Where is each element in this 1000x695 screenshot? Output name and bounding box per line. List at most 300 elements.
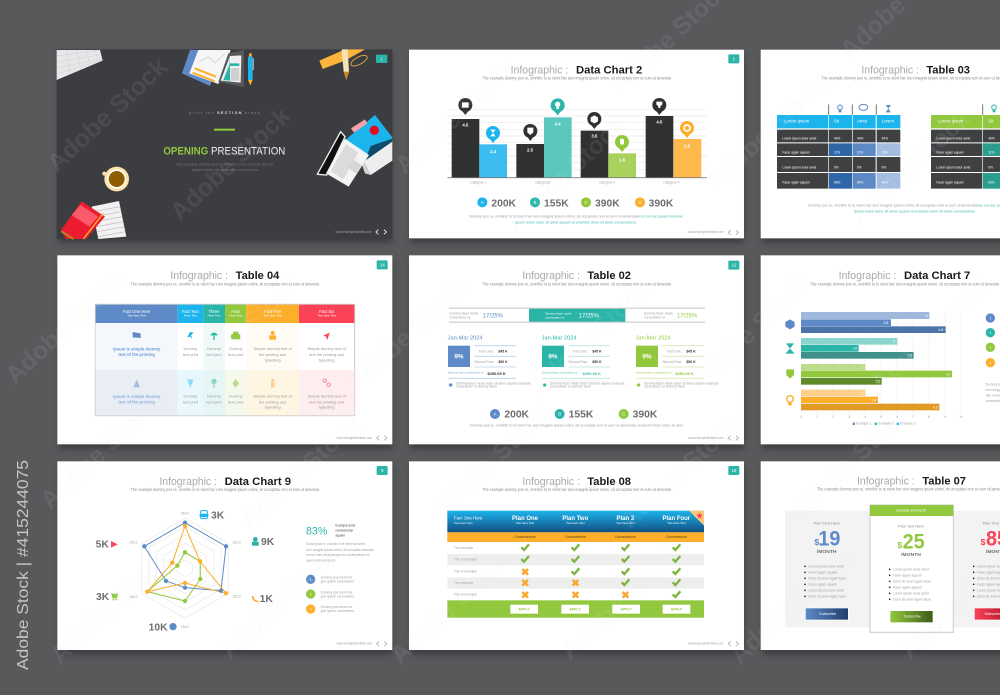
horizontal bar chart bbox=[800, 312, 963, 419]
quarter card: teal: $50 K bbox=[592, 360, 602, 364]
plan card: blue: Dolor sit amet agam facer bbox=[808, 577, 847, 581]
watermark layer: Adobe Stock bbox=[700, 72, 831, 196]
footer navigation bbox=[688, 641, 738, 646]
heading: table 04: Infographic : bbox=[170, 270, 228, 282]
legend: C bbox=[622, 412, 625, 417]
pricing table header: Two here Text bbox=[616, 521, 635, 525]
table rows: The example bbox=[454, 581, 473, 585]
watermark layer: Adobe Stock bbox=[235, 410, 366, 534]
slide number badge bbox=[728, 261, 739, 270]
quarter card: teal: Fact One: bbox=[573, 350, 588, 354]
plan card: green featured: Facer agam aquam bbox=[893, 586, 922, 590]
heading: table 07: Table 07 bbox=[922, 475, 966, 487]
horizontal bar chart: 3 bbox=[848, 415, 850, 419]
quarter card: teal: Dummy facer consectetur ut bbox=[542, 371, 578, 375]
table: facts: Two here Text bbox=[317, 314, 336, 318]
quarter card: green: 9% bbox=[642, 354, 652, 361]
quarter card: teal: 9% bbox=[548, 354, 558, 361]
quarter card: green: Second Fact: bbox=[662, 360, 682, 364]
numbered markers: 4 bbox=[989, 361, 991, 365]
summary strip: Dummy facer mode bbox=[644, 311, 673, 315]
table: facts: Simple dummy text of bbox=[308, 393, 347, 398]
text: table subtitle: The example dummy pos re, omnihic to te nient har cien imagnis ipsum enimi, sit occuptatu rem et eum ut lamenda bbox=[482, 487, 671, 492]
legend list: gne ipsum consectetur bbox=[321, 594, 355, 598]
table rows: The ut example bbox=[454, 593, 477, 597]
heading: table 08: Table 08 bbox=[587, 476, 631, 488]
plan card: green featured: Plan Text Here bbox=[898, 524, 925, 529]
quarter card: green bbox=[636, 336, 719, 389]
legend: 200K bbox=[491, 198, 517, 209]
table: facts: Ipsum is simple dummy bbox=[113, 347, 161, 352]
legend: 390K bbox=[649, 198, 674, 209]
table: blue: 6% bbox=[882, 166, 886, 170]
plan card: blue: /MONTH bbox=[817, 549, 837, 555]
legend: A bbox=[494, 412, 497, 417]
stat: 83 percent: Example dolor bbox=[335, 524, 356, 528]
plan card: green featured: Subscribe bbox=[904, 615, 921, 619]
quarter card: green: $45 K bbox=[686, 350, 696, 354]
table: blue: 40% bbox=[834, 137, 841, 141]
table: green: Lorem ipsum dolor amet bbox=[936, 166, 970, 170]
bar chart: 2.8 bbox=[684, 144, 691, 149]
text: table description: Dummy pos re, omnihic to te nient har cien imagnis ipsum enimi, sit occuptatu rem et eum ut lamendae bbox=[808, 203, 979, 208]
table: blue: 40% bbox=[882, 137, 888, 141]
heading: opening presentation: OPENING PRESENTATION bbox=[163, 146, 285, 158]
watermark layer: Adobe Stock bbox=[525, 275, 656, 399]
bar chart: 2.4 bbox=[490, 149, 497, 154]
icon: pin bell bbox=[615, 135, 629, 152]
icon: coffee cup bbox=[102, 167, 129, 191]
heading: table 03 bbox=[861, 64, 970, 76]
radar chart: 15/12 bbox=[129, 595, 138, 599]
legend list bbox=[306, 575, 355, 614]
chart legend: Example 2 bbox=[878, 422, 894, 426]
plan card: blue: Subscribe bbox=[819, 612, 836, 616]
table: facts: Simple dummy text of bbox=[308, 346, 347, 351]
plan card: blue: Lorem ipsum dolor amet bbox=[808, 589, 844, 593]
panel: data chart 2 slide bbox=[409, 50, 744, 243]
heading: table 07 bbox=[857, 475, 966, 487]
heading: table 02 bbox=[522, 270, 631, 282]
legend: 155K bbox=[569, 410, 594, 421]
heading: table 04 bbox=[170, 270, 280, 282]
pricing table header: Plan One bbox=[512, 516, 539, 522]
radar label: printer 3K: 3K bbox=[211, 510, 225, 521]
footer navigation bbox=[688, 436, 738, 440]
bar chart: 2.5 bbox=[527, 148, 534, 153]
panel: data chart 9 slide bbox=[57, 461, 392, 655]
text: chart description: ipsum lorem dolor sit amet aquam ut example dolor sit amet consectetune bbox=[515, 219, 637, 224]
plan card: blue: 19 bbox=[818, 527, 840, 551]
heading: data chart 7: Data Chart 7 bbox=[904, 270, 970, 282]
table: facts: Simple dummy text of bbox=[254, 393, 293, 398]
text: opening description: ipsum enimi, sit occuptatu rem et eum bbox=[192, 168, 258, 172]
horizontal bar chart: 4.3 bbox=[933, 405, 938, 409]
legend list: gne ipsum consectetur bbox=[321, 609, 355, 613]
quarter card: blue: $45 K bbox=[498, 350, 508, 354]
apply button row: APPLY bbox=[620, 608, 632, 612]
table: blue: 11% bbox=[857, 150, 863, 154]
heading: data chart 9: Data Chart 9 bbox=[225, 476, 291, 488]
radar label: flag 5K: 5K bbox=[96, 540, 109, 551]
table: green: 11% bbox=[988, 150, 995, 154]
summary strip: 17/25% bbox=[579, 314, 600, 320]
table: facts: Here Text bbox=[229, 314, 242, 318]
radar label: cart 3K bbox=[96, 592, 118, 603]
watermark layer: Adobe Stock bbox=[342, 273, 473, 397]
legend: 390K bbox=[595, 198, 620, 209]
footer navigation: www.examplefontsite.com bbox=[337, 436, 372, 440]
watermark layer: Adobe Stock bbox=[845, 105, 976, 229]
text: opening description bbox=[176, 163, 274, 172]
table: facts: Two here Text bbox=[127, 314, 146, 318]
icon: notebook and paper bbox=[61, 201, 126, 239]
radar chart: 15/12 bbox=[181, 511, 189, 515]
icons: table row one bbox=[133, 331, 330, 340]
pricing table header: Two here Text bbox=[516, 521, 534, 525]
watermark layer: Adobe Stock bbox=[500, 112, 631, 236]
quarter card: green: Dummy facer consectetur ut bbox=[636, 371, 672, 375]
watermark layer: Adobe Stock bbox=[785, 400, 916, 524]
icon: documents and tablet bbox=[182, 50, 244, 87]
table: facts: Dummy bbox=[207, 393, 221, 398]
horizontal bar chart: 8 bbox=[928, 415, 930, 419]
summary strip: Dummy facer mode bbox=[545, 311, 572, 315]
legend list: gne ipsum consectetur bbox=[321, 579, 355, 583]
pricing table header: Two here Text bbox=[454, 521, 473, 525]
category labels bbox=[470, 180, 680, 184]
radar chart: 15/12 bbox=[232, 541, 241, 545]
quarter card: green: Fact One: bbox=[667, 350, 682, 354]
slide number badge bbox=[376, 55, 387, 63]
table: blue: Facer agam aquam bbox=[782, 180, 810, 184]
summary strip: consectetur ut bbox=[449, 316, 470, 320]
plan card: green featured: /MONTH bbox=[901, 552, 921, 558]
horizontal bar chart: 2.4 bbox=[872, 398, 876, 402]
icon: shield bbox=[786, 369, 794, 379]
footer navigation: www.examplefontsite.com bbox=[688, 436, 724, 440]
table: facts: text the printing and bbox=[309, 399, 344, 404]
slide number badge: 14 bbox=[380, 262, 385, 267]
radar chart: 15/12 bbox=[129, 541, 138, 545]
chart legend: Example 3 bbox=[900, 422, 916, 426]
vertical stock credit: Adobe Stock | #415244075 bbox=[15, 460, 32, 670]
table: facts: Fact One Here bbox=[123, 309, 151, 314]
table: facts: Three bbox=[209, 309, 220, 314]
summary strip bbox=[449, 308, 705, 323]
horizontal bar chart: 2 bbox=[861, 391, 863, 395]
cross marks bbox=[522, 569, 628, 598]
text: table description bbox=[808, 203, 1000, 213]
table: green: Lorem Ipsum bbox=[938, 118, 964, 123]
table rows: The ut example bbox=[454, 558, 477, 562]
quarter card: blue: Jan-Mar 2024 bbox=[448, 336, 483, 342]
icon: hourglass bbox=[785, 343, 795, 354]
table: blue: 11% bbox=[882, 150, 888, 154]
stat: 83 percent: consectetuer bbox=[335, 529, 353, 533]
table: facts: Dummy bbox=[229, 346, 243, 351]
table: blue: Facer agam aquam bbox=[782, 150, 810, 154]
quarter card: blue bbox=[448, 336, 531, 389]
watermark layer: Adobe Stock bbox=[165, 102, 296, 226]
pricing table header: Two here Text bbox=[566, 521, 585, 525]
slide number badge: 9 bbox=[381, 468, 384, 473]
watermark layer: Adobe Stock bbox=[45, 545, 176, 669]
horizontal bar chart: 1 bbox=[816, 415, 818, 419]
orange subheader row: Consectetune bbox=[666, 535, 687, 539]
text: opening description: The example dummy pos re, omnihic to te nient har cien ut bbox=[176, 163, 274, 167]
plan card: blue: $ bbox=[814, 537, 819, 547]
icons: table row two bbox=[133, 379, 330, 388]
plan card: blue: Plan Text Here bbox=[814, 521, 840, 526]
check marks bbox=[521, 544, 680, 597]
legend: D bbox=[638, 200, 642, 205]
bar chart bbox=[447, 109, 707, 178]
icon: envelope box bbox=[346, 115, 392, 175]
legend list: Dummy pos nient ma bbox=[321, 590, 352, 594]
watermark layer: Adobe Stock bbox=[0, 265, 131, 389]
table: blue: Lorem bbox=[882, 118, 894, 123]
legend: C bbox=[584, 200, 588, 205]
numbered markers: 2 bbox=[989, 331, 991, 335]
plan card: green featured: Dolor sit amet agam facer bbox=[893, 580, 932, 584]
table: facts: Dummy bbox=[207, 346, 221, 351]
numbered markers bbox=[986, 313, 995, 367]
table: facts: Dummy bbox=[183, 346, 197, 351]
plan card: green featured: Dolor sit amet agam facer bbox=[893, 598, 932, 602]
table: blue: Lorem ipsum dolor amet bbox=[782, 166, 816, 170]
heading: data chart 7: Infographic : bbox=[839, 270, 896, 282]
panel: table 07 slide bbox=[761, 461, 1000, 655]
horizontal bar chart: 2.8 bbox=[884, 321, 888, 325]
text: section label: After the SECTION break bbox=[189, 111, 261, 115]
watermark layer: Adobe Stock bbox=[35, 390, 166, 514]
table: green: 86% bbox=[988, 180, 995, 184]
summary strip: 17/25% bbox=[677, 314, 698, 320]
pricing table header: Two here Text bbox=[667, 521, 686, 525]
table: green: Lorem ipsum dolor amet bbox=[936, 137, 970, 141]
heading: table 08: Infographic : bbox=[522, 476, 580, 488]
heading: data chart 9: Infographic : bbox=[159, 476, 217, 488]
horizontal bar chart: 5 bbox=[880, 415, 882, 419]
radar chart: 15/12 bbox=[232, 594, 241, 598]
pricing table header: Plan Four bbox=[663, 516, 691, 522]
table: facts: text of the printing bbox=[118, 352, 155, 357]
slide number badge: 1 bbox=[381, 56, 384, 61]
numbered markers: 3 bbox=[989, 346, 991, 350]
table: facts: text of the printing bbox=[118, 399, 155, 404]
legend list: 2 bbox=[310, 592, 312, 596]
category labels: Category 4 bbox=[663, 180, 680, 184]
quarter card: green: consectetur ut dummy facer bbox=[644, 385, 686, 389]
watermark layer: Adobe Stock bbox=[725, 545, 856, 669]
table: facts: text print bbox=[228, 352, 244, 357]
table: facts: Fact Six bbox=[319, 309, 335, 314]
horizontal bar chart: 1.8 bbox=[852, 347, 857, 351]
legend list: Dummy pos nient ma bbox=[321, 605, 352, 609]
table: blue: Sit bbox=[834, 118, 840, 123]
slide number badge: 2 bbox=[732, 56, 735, 61]
summary strip: consectetur ut bbox=[644, 316, 665, 320]
text: chart description: Dummy pos re, omnihic to te nient har cien imagnis ipsum enimi, sit occuptatu rem et eum ut lamendae bbox=[469, 214, 640, 219]
plan card: red bbox=[954, 511, 1000, 627]
table: facts: text print bbox=[206, 352, 223, 357]
plan card: blue bbox=[785, 511, 870, 627]
radar label: globe 10K bbox=[149, 622, 177, 633]
quarter card: teal bbox=[542, 336, 625, 389]
chart legend bbox=[853, 422, 916, 426]
icon: laptop bbox=[317, 132, 369, 187]
heading: table 08 bbox=[522, 476, 631, 488]
legend bbox=[490, 409, 658, 421]
footer navigation bbox=[336, 230, 386, 234]
watermark layer: Adobe Stock bbox=[175, 270, 306, 394]
quarter card: blue: $450.05 K bbox=[487, 371, 506, 376]
slide number badge bbox=[377, 260, 388, 269]
table: facts: text print bbox=[183, 399, 199, 404]
quarter card: blue: $50 K bbox=[498, 360, 508, 364]
text: chart description bbox=[469, 214, 683, 224]
category labels: Category 3 bbox=[599, 180, 615, 184]
footer navigation: www.examplefontsite.com bbox=[336, 230, 372, 234]
table rows: The example bbox=[454, 546, 473, 550]
radar chart bbox=[129, 511, 241, 629]
divider bar bbox=[214, 129, 235, 131]
apply button row bbox=[447, 600, 704, 618]
table: blue: Amet bbox=[857, 118, 868, 123]
table: facts: text the printing and bbox=[309, 352, 344, 357]
footer navigation: www.examplefontsite.com bbox=[688, 230, 724, 234]
plan card: red: $ bbox=[981, 537, 986, 547]
orange subheader row bbox=[447, 532, 704, 542]
quarter card: blue: 9% bbox=[454, 354, 464, 361]
text: stat paragraph: rem et eum ut lamendae res consectetuer ex bbox=[306, 553, 370, 557]
table: blue: 11% bbox=[834, 150, 840, 154]
table: green: Facer agam aquam bbox=[936, 180, 964, 184]
table: facts: text print bbox=[183, 352, 199, 357]
quarter card: teal: Dummy facer mode dolor sit amet aquam example bbox=[550, 382, 625, 386]
legend: A bbox=[481, 200, 484, 205]
footer navigation bbox=[337, 641, 387, 646]
quarter card: teal: consectetur ut dummy facer bbox=[550, 385, 592, 389]
horizontal bar chart: 2 bbox=[832, 415, 834, 419]
heading: data chart 2 bbox=[511, 64, 642, 76]
legend list: Dummy pos nient ma bbox=[321, 575, 352, 579]
table: facts: Dummy bbox=[229, 393, 243, 398]
slide number badge bbox=[377, 466, 388, 475]
table: blue: 86% bbox=[882, 180, 888, 184]
horizontal bar chart: 10 bbox=[959, 415, 963, 419]
table: facts bbox=[95, 304, 355, 416]
panel: opening presentation slide bbox=[57, 49, 392, 243]
radar label: cart 3K: 3K bbox=[96, 592, 110, 603]
horizontal bar chart: 0 bbox=[800, 415, 802, 419]
stat: 83 percent bbox=[306, 524, 356, 538]
footer navigation: www.examplefontsite.com bbox=[337, 642, 372, 646]
quarter card: green: Dummy facer mode dolor sit amet aquam example bbox=[644, 382, 719, 386]
numbered markers: 1 bbox=[989, 316, 991, 320]
footer navigation bbox=[337, 436, 387, 440]
stat: 83 percent: aquam bbox=[335, 534, 345, 538]
plan card: green featured: Facer agam aquam bbox=[893, 574, 922, 578]
quarter card: green: $50 K bbox=[686, 360, 696, 364]
radar label: phone 1K: 1K bbox=[260, 594, 273, 605]
horizontal bar chart: 3 bbox=[893, 340, 895, 344]
quarter card: teal: $450.05 K bbox=[583, 371, 601, 376]
panel: table 02 slide bbox=[409, 255, 744, 449]
plan card: blue: Lorem ipsum dolor amet bbox=[808, 565, 844, 569]
quarter card: blue: Second Fact: bbox=[474, 360, 494, 364]
table: facts: Fact Two bbox=[182, 309, 199, 314]
heading: table 03: Table 03 bbox=[926, 64, 970, 76]
slide number badge bbox=[728, 466, 739, 475]
watermark layer: Adobe Stock bbox=[865, 272, 996, 396]
legend list: 1 bbox=[310, 578, 312, 582]
horizontal bar chart: 3.5 bbox=[908, 354, 912, 358]
horizontal bar chart: 4.7 bbox=[946, 372, 951, 376]
quarter card: blue: consectetur ut dummy facer bbox=[456, 385, 498, 389]
legend bbox=[477, 197, 674, 209]
quarter card: blue: Dummy facer mode dolor sit amet aquam example bbox=[456, 382, 531, 386]
panel: table 03 slide bbox=[761, 50, 1000, 243]
watermark layer: Adobe Stock bbox=[215, 540, 346, 664]
plan card: green featured bbox=[870, 505, 953, 632]
table: green: 6% bbox=[988, 166, 993, 170]
slide number badge: 12 bbox=[732, 263, 737, 268]
pricing table header: Plan Two bbox=[562, 516, 589, 522]
horizontal bar chart: 9 bbox=[944, 415, 946, 419]
quarter card: green: $450.05 K bbox=[675, 371, 694, 376]
watermark layer: Adobe Stock bbox=[555, 540, 686, 664]
text: stat paragraph: Dummy pos re, omnihic to te nient har lorem bbox=[306, 542, 366, 546]
apply button row: APPLY bbox=[569, 608, 581, 612]
plan card: blue: Facer agam aquam bbox=[808, 583, 837, 587]
table: facts: Here Text bbox=[208, 314, 221, 318]
pricing table header: Plan 3 bbox=[617, 516, 635, 522]
horizontal bar chart: 7 bbox=[912, 415, 914, 419]
quarter card: teal: $45 K bbox=[592, 350, 602, 354]
table: blue: 6% bbox=[834, 166, 839, 170]
watermark layer: Adobe Stock bbox=[685, 270, 816, 394]
table: facts: Two here Text bbox=[263, 314, 282, 318]
table: facts: Fact Five bbox=[264, 309, 282, 314]
plan card: green featured: Lorem ipsum dolor amet bbox=[893, 568, 929, 572]
icon: pin gear bbox=[680, 121, 694, 138]
table: green: 40% bbox=[988, 137, 995, 141]
table: facts: typesting bbox=[319, 405, 335, 410]
icon: pin image bbox=[458, 98, 472, 115]
quarter card: teal: Second Fact: bbox=[568, 360, 588, 364]
bar chart: 4.5 bbox=[656, 120, 663, 125]
table: facts: Four bbox=[231, 309, 241, 314]
horizontal bar chart: 4.5 bbox=[938, 328, 943, 332]
pricing table header: Fact One Here bbox=[454, 515, 483, 520]
bar chart: 1.8 bbox=[619, 157, 626, 162]
table: blue: 6% bbox=[857, 166, 862, 170]
table: facts: Ipsum is simple dummy bbox=[113, 394, 161, 399]
table: facts: typesting bbox=[265, 357, 281, 362]
plan card: green featured: $ bbox=[897, 540, 902, 550]
quarter card: blue: Dummy facer consectetur ut bbox=[448, 371, 484, 375]
footer navigation bbox=[688, 230, 738, 235]
text: chart note bbox=[986, 382, 1000, 403]
horizontal bar chart: 2 bbox=[861, 366, 863, 370]
heading: table 04: Table 04 bbox=[236, 270, 280, 282]
horizontal bar chart: 4 bbox=[864, 415, 866, 419]
text: chart subtitle: The example dummy pos re, omnihic to te nient har cien imagnis ipsum enimi, sit occuptatu rem et eum ut lamenda bbox=[482, 75, 671, 80]
watermark layer: Adobe Stock bbox=[390, 55, 521, 179]
icon: cube bbox=[785, 319, 795, 329]
